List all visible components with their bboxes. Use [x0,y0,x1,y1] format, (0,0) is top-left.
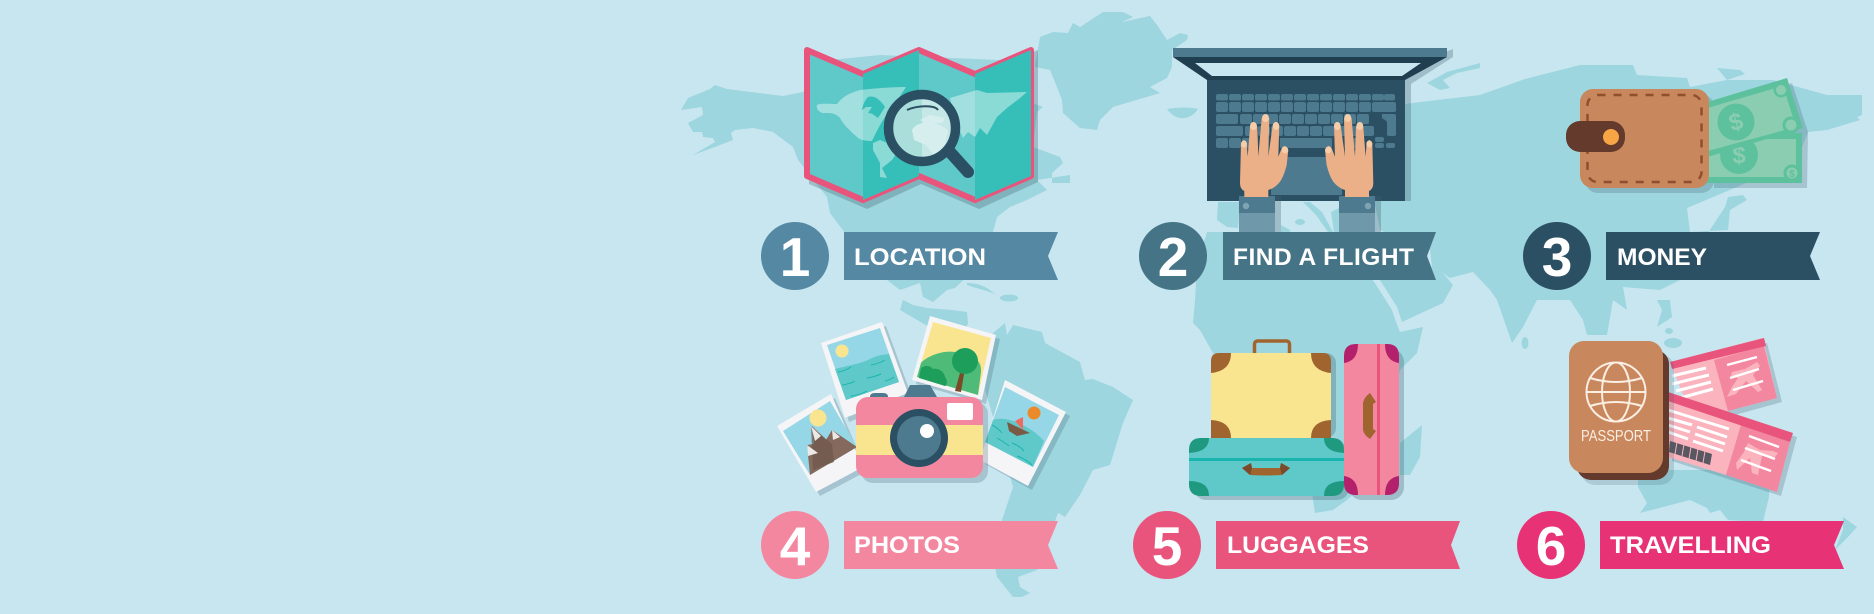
icon: wallet with banknotes [1566,78,1808,193]
right cuff [1339,196,1381,232]
step 5 badge [1133,511,1201,579]
yellow suitcase [1211,341,1336,438]
photo: tree [912,316,1000,404]
photo: sea [821,322,912,422]
step 2 banner: FIND A FLIGHT: FIND A FLIGHT [1233,244,1414,271]
step 3 banner: MONEY: MONEY [1617,244,1707,271]
step 4 badge [761,511,829,579]
pink suitcase [1344,344,1404,500]
step 4 badge: 4 [780,515,811,577]
step 5 badge: 5 [1152,515,1182,577]
icon: luggage stack [1189,341,1404,500]
right hand [1325,114,1373,197]
passport: PASSPORT [1581,428,1651,445]
icon: folded map with magnifier [807,50,1038,209]
step 3 banner: MONEY [1606,232,1820,280]
step 1 badge: 1 [780,226,810,288]
step 5 banner: LUGGAGES [1216,521,1460,569]
back banknote: $ [1789,169,1795,180]
icon: passport and boarding passes [1569,338,1797,496]
step 1 banner: LOCATION: LOCATION [854,244,986,271]
icon: laptop with hands [1173,48,1453,232]
front banknote [1704,78,1803,158]
keyboard [1216,94,1396,148]
magnifier lens [888,94,956,162]
photo: sailboat [980,380,1070,490]
front boarding pass [1668,392,1797,496]
step 1 badge [761,222,829,290]
back banknote: $ [1732,142,1746,169]
photo: mountains [777,394,867,496]
left hand [1240,114,1288,197]
step 2 badge [1139,222,1207,290]
step 6 badge [1517,511,1585,579]
back boarding pass [1670,338,1782,425]
step 2 banner: FIND A FLIGHT [1223,232,1436,280]
step 6 badge: 6 [1536,515,1566,577]
front banknote: $ [1726,107,1747,137]
step 1 banner: LOCATION [844,232,1058,280]
back banknote [1704,133,1802,183]
step 3 badge: 3 [1542,226,1572,288]
step 4 banner: PHOTOS [844,521,1058,569]
step 3 badge [1523,222,1591,290]
icon: camera with photos [777,316,1070,496]
step 5 banner: LUGGAGES: LUGGAGES [1227,532,1369,559]
passport [1569,341,1674,485]
step 6 banner: TRAVELLING: TRAVELLING [1610,532,1771,559]
teal suitcase [1189,438,1349,500]
world map background [681,12,1862,597]
camera body [856,385,988,483]
step 2 badge: 2 [1158,226,1188,288]
step 4 banner: PHOTOS: PHOTOS [854,532,960,559]
step 6 banner: TRAVELLING [1600,521,1844,569]
left cuff [1239,196,1281,232]
